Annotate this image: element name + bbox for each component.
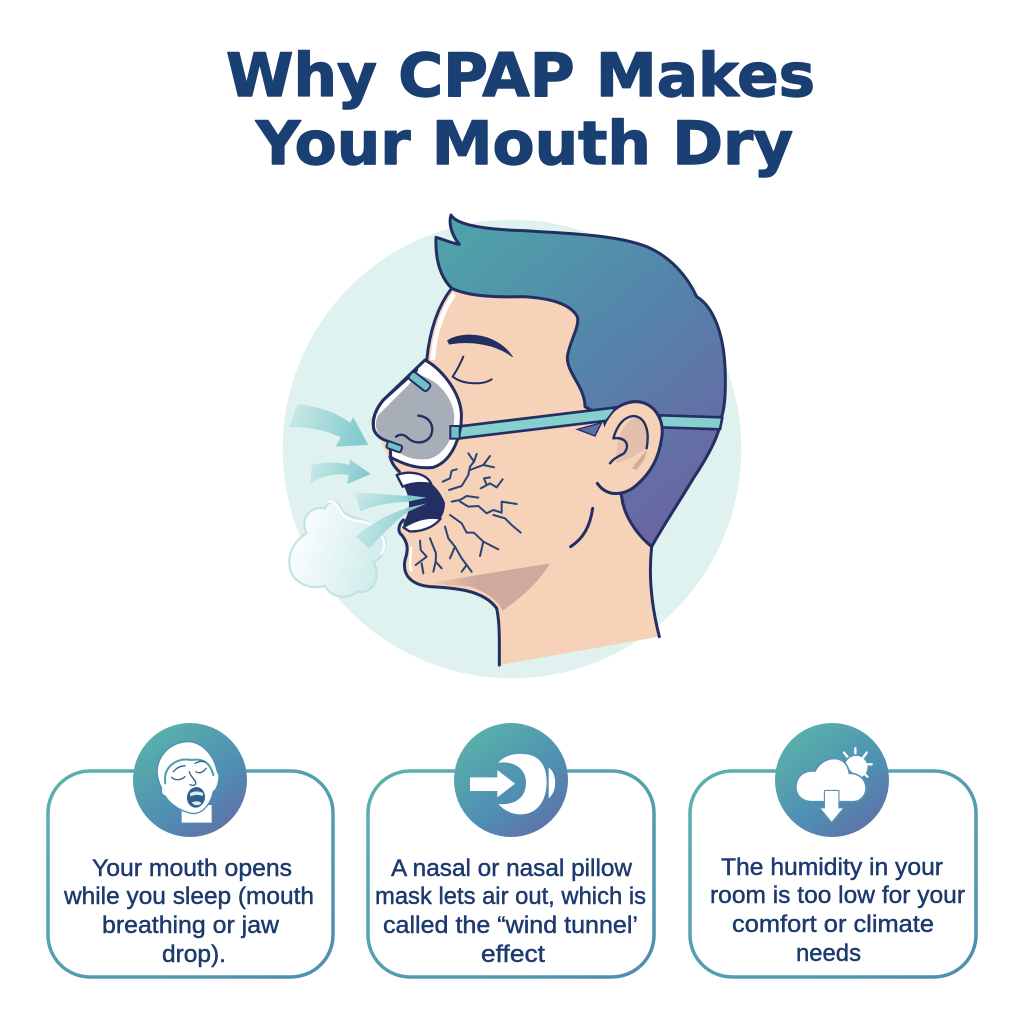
text: mask leak: effect	[481, 941, 545, 968]
sideburn	[577, 423, 602, 436]
nasal mask	[373, 360, 461, 468]
icon: arrow entering nasal mask	[454, 723, 568, 837]
forehead highlight	[433, 294, 454, 360]
icon: sleeping face with open mouth	[133, 723, 247, 837]
text: low humidity: room is too low for your	[710, 882, 965, 909]
air arrow: middle incoming	[311, 459, 371, 484]
text: mask leak: mask lets air out, which is	[375, 883, 646, 910]
background circle	[283, 220, 741, 678]
title: Your Mouth Dry	[255, 109, 793, 179]
ear	[590, 402, 662, 494]
panel: low humidity	[690, 723, 976, 977]
card outline	[690, 771, 976, 977]
title	[226, 41, 815, 179]
title: Why CPAP Makes	[226, 41, 815, 111]
panel: mask leak	[368, 723, 654, 977]
text: mouth opens	[63, 855, 314, 968]
text: mouth opens: while you sleep (mouth	[63, 883, 314, 910]
card outline	[48, 771, 333, 977]
air arrow: upper incoming	[289, 404, 368, 447]
text: mouth opens: breathing or jaw	[102, 912, 280, 939]
card outline	[368, 771, 654, 977]
panel: mouth opens	[48, 723, 333, 977]
text: mask leak: A nasal or nasal pillow	[391, 855, 633, 882]
headgear strap back	[660, 415, 722, 429]
text: mouth opens: Your mouth opens	[92, 855, 292, 882]
text: mouth opens: drop).	[162, 941, 226, 968]
headgear strap front	[452, 407, 617, 439]
open mouth	[397, 473, 445, 531]
text: low humidity: comfort or climate	[732, 911, 934, 938]
air stream: escaping from mouth	[355, 493, 427, 548]
dry skin cracks	[416, 453, 521, 573]
face outline	[390, 288, 659, 665]
icon: cloud, sun and down arrow	[775, 723, 889, 837]
text: low humidity	[710, 854, 965, 967]
text: low humidity: needs	[796, 940, 861, 967]
illustration: man with CPAP mask breathing through open mouth	[283, 215, 741, 678]
text: mask leak	[375, 855, 646, 968]
face skin	[370, 283, 659, 665]
cloud of escaping air	[289, 502, 385, 597]
text: low humidity: The humidity in your	[721, 854, 943, 881]
chin shadow	[427, 563, 550, 611]
chin highlight	[410, 547, 412, 572]
hair	[436, 215, 725, 547]
text: mask leak: called the “wind tunnel’	[383, 912, 638, 939]
closed eye and eyebrow	[448, 335, 512, 383]
